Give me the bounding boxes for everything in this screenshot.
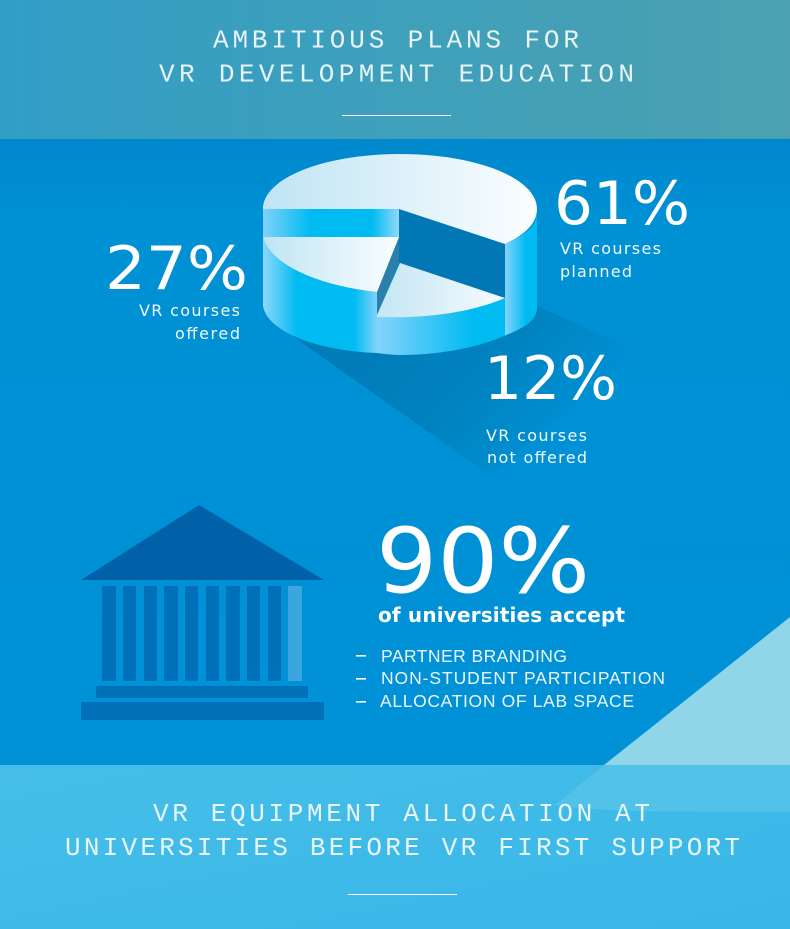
footer heading: VR EQUIPMENT ALLOCATION AT [153,799,650,829]
list of accepted items: PARTNER BRANDING [381,646,567,666]
main background [0,139,790,766]
label: 27%: 27% [105,234,248,304]
label: 61%: 61% [554,169,690,239]
label: 27% [105,234,248,343]
icon: university building [81,505,324,720]
list of accepted items: ALLOCATION OF LAB SPACE [380,691,634,711]
header band [0,0,790,139]
decorative light wedge [604,617,790,765]
pie shadow [292,306,640,475]
slice: 61% planned [263,154,537,336]
footer heading [65,799,740,863]
label: 12%: VR courses [486,426,587,445]
label: 61%: planned [560,262,632,281]
list of accepted items [356,646,665,711]
slice: 27% offered [263,209,399,353]
stat: 90% of universities accept: 90% [376,509,590,614]
stat: 90% of universities accept: of universities accept [378,603,625,627]
3D pie chart [263,154,537,355]
label: 12%: not offered [487,448,587,467]
title [159,26,634,90]
label: 61%: VR courses [560,239,661,258]
slice: 12% not offered [377,263,505,355]
label: 12%: 12% [484,344,617,414]
label: 27%: VR courses [139,301,240,320]
list of accepted items: NON-STUDENT PARTICIPATION [381,668,665,688]
footer heading: UNIVERSITIES BEFORE VR FIRST SUPPORT [65,833,740,863]
title: AMBITIOUS PLANS FOR [213,26,579,56]
label: 12% [484,344,617,467]
label: 27%: offered [175,324,240,343]
footer band [0,617,790,929]
title: VR DEVELOPMENT EDUCATION [159,60,634,90]
label: 61% [554,169,690,281]
